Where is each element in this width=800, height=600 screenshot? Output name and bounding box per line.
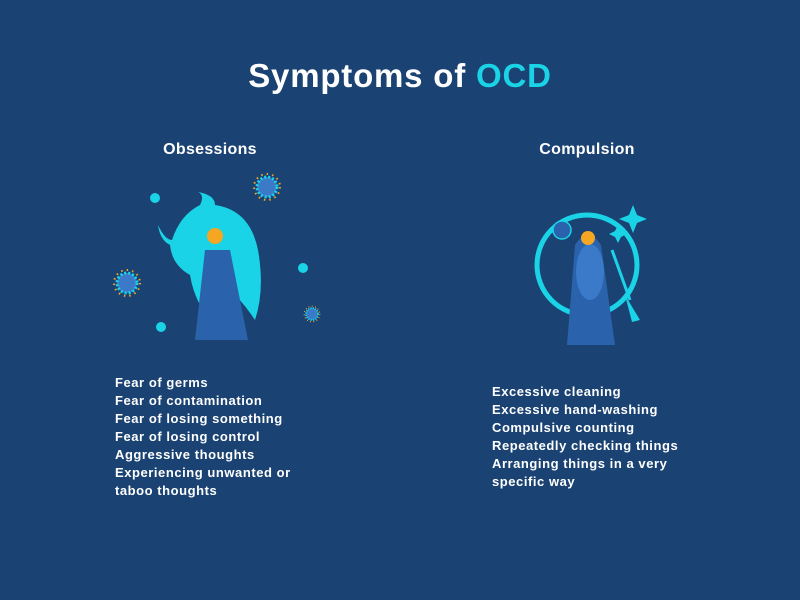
list: obsessions: taboo thoughts (115, 483, 217, 498)
list: obsessions: Fear of losing something (115, 411, 283, 426)
illustration: obsessions (114, 174, 320, 340)
list: obsessions: Fear of contamination (115, 393, 262, 408)
heading: obsessions: Obsessions (163, 141, 257, 158)
heading: compulsion: Compulsion (539, 141, 635, 158)
list: obsessions: Fear of losing control (115, 429, 260, 444)
illustration: compulsion (537, 205, 647, 345)
list: compulsion (492, 384, 678, 489)
list: compulsion: Arranging things in a very (492, 456, 667, 471)
list: compulsion: Repeatedly checking things (492, 438, 678, 453)
list: obsessions: Fear of germs (115, 375, 208, 390)
list: compulsion: Compulsive counting (492, 420, 635, 435)
list: compulsion: Excessive hand-washing (492, 402, 658, 417)
title: Symptoms of OCD (248, 57, 552, 94)
list: obsessions (115, 375, 291, 498)
list: obsessions: Experiencing unwanted or (115, 465, 291, 480)
list: compulsion: Excessive cleaning (492, 384, 621, 399)
list: compulsion: specific way (492, 474, 575, 489)
list: obsessions: Aggressive thoughts (115, 447, 255, 462)
